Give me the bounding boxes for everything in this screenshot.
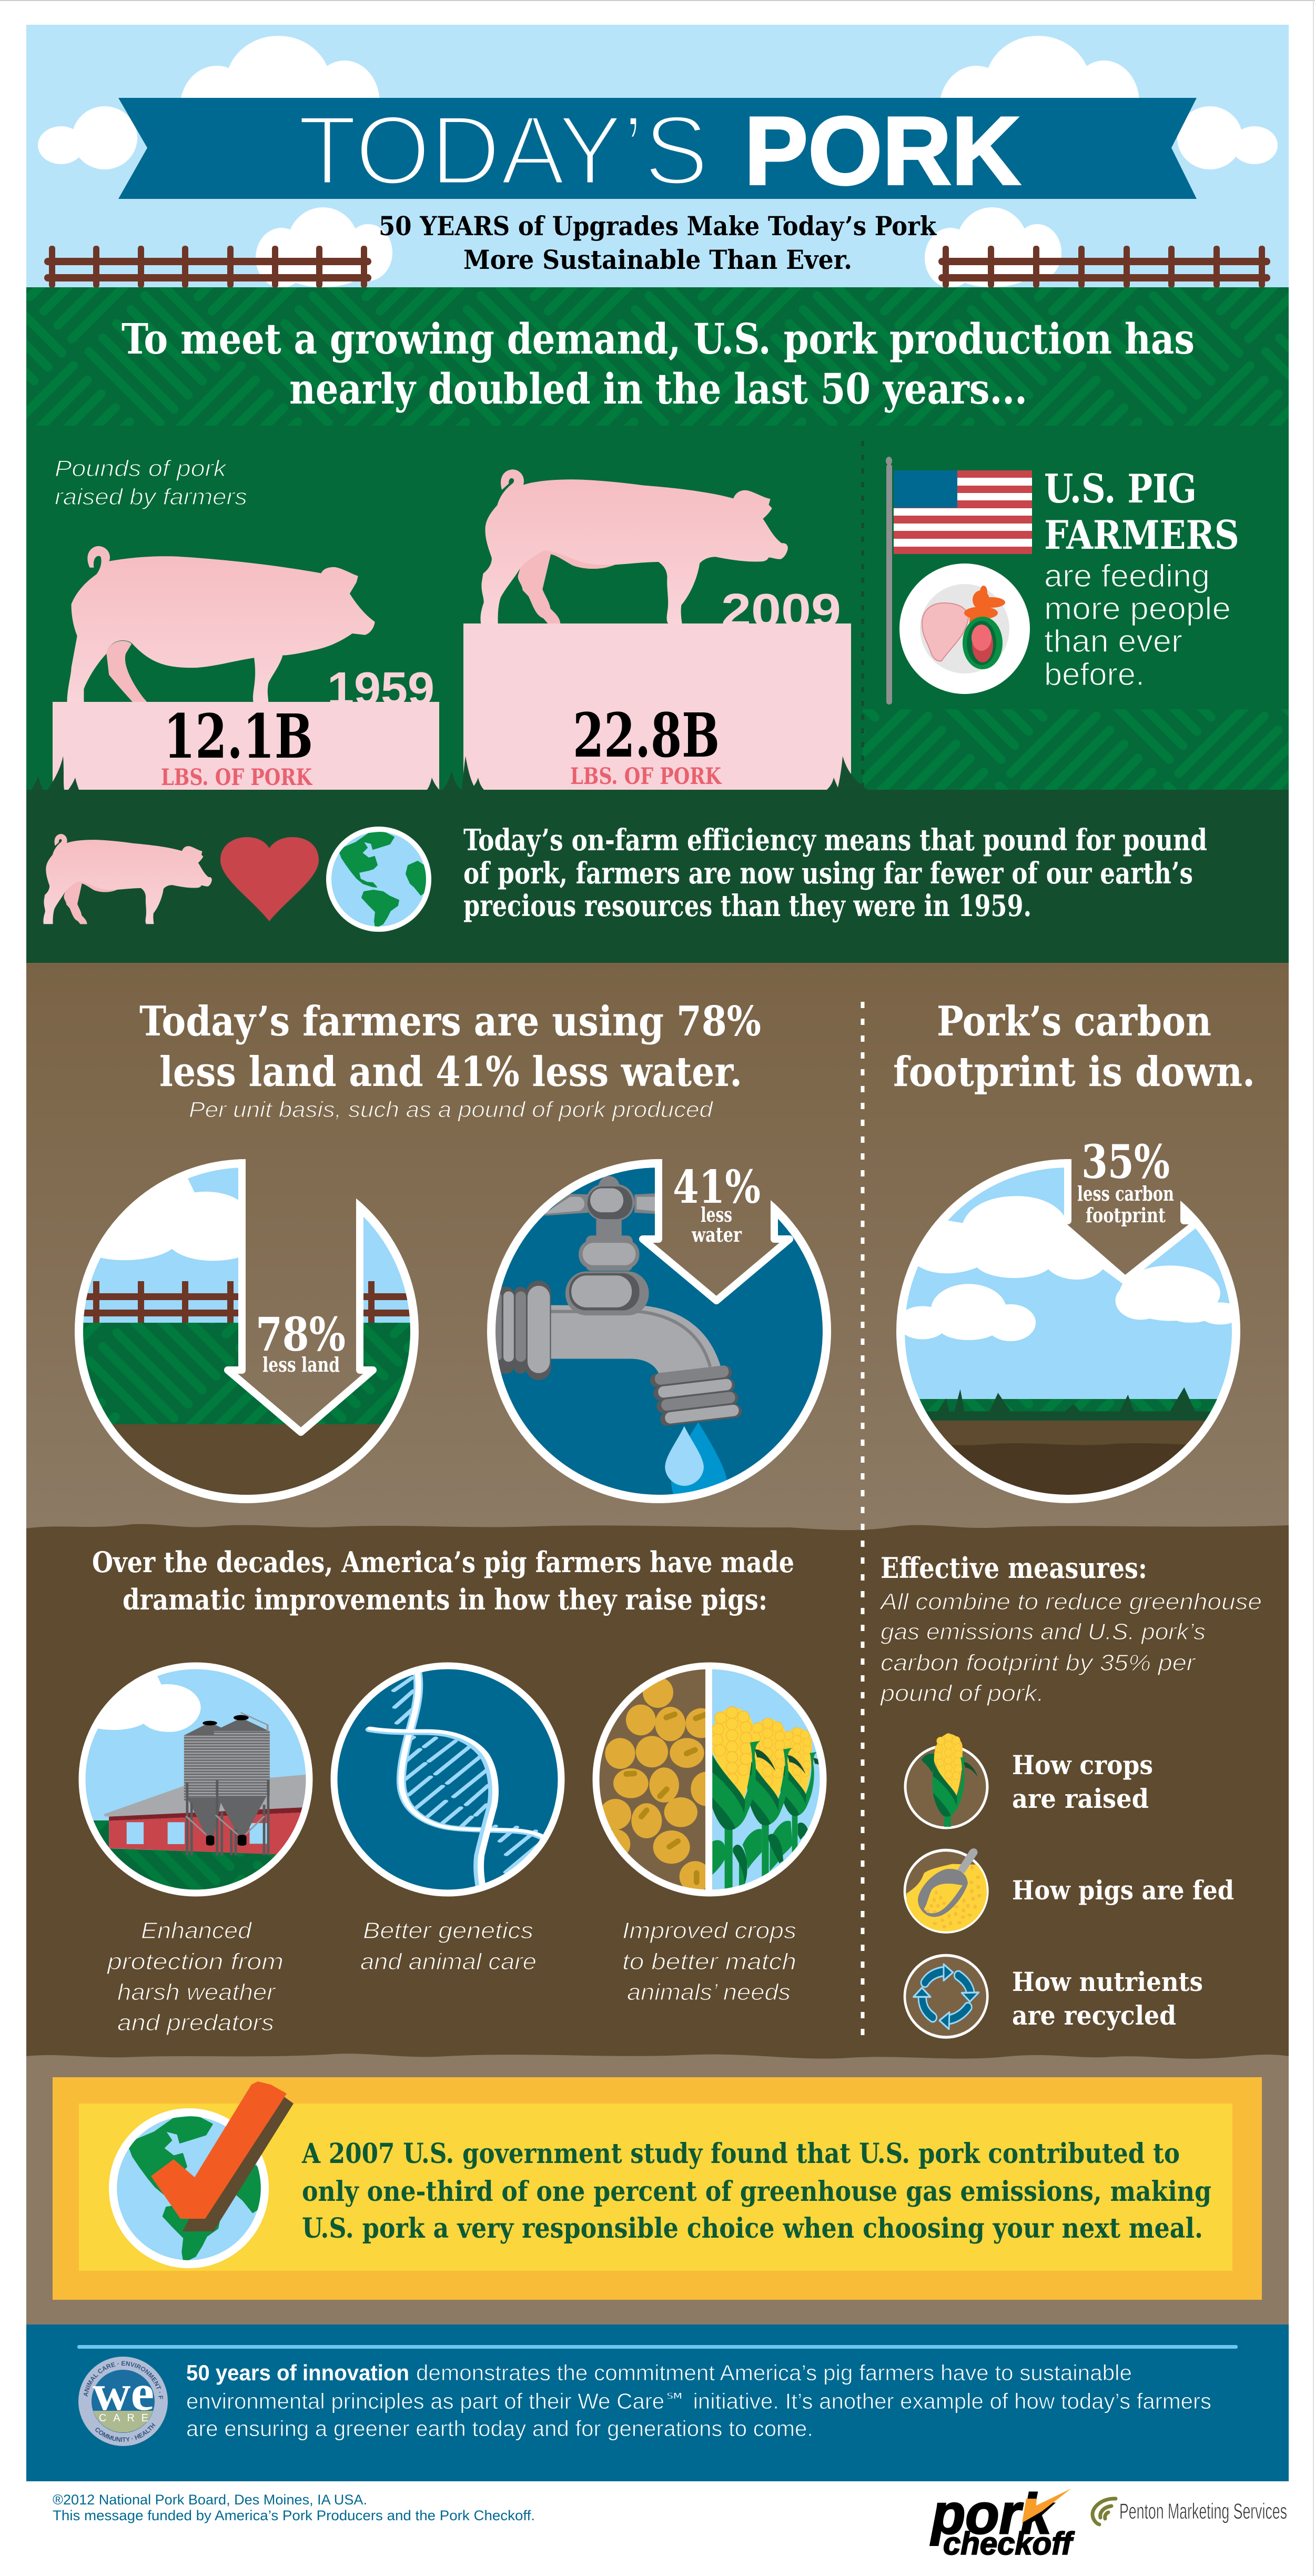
footer: credits: ®2012 National Pork Board, Des Moines, IA USA.: [53, 2492, 367, 2508]
footer: credits: [53, 2492, 535, 2523]
icon: plate of food: [899, 564, 1030, 694]
circle: barn and silos: [79, 1663, 312, 1896]
text: efficiency: precious resources than they were in 1959.: [463, 889, 1031, 923]
title: [298, 95, 1020, 205]
text: only one-third of one percent of greenhouse gas emissions, making: [302, 2176, 1211, 2208]
icon: soybeans: [603, 1678, 705, 1890]
text: innovation: 50 years of innovation: [186, 2360, 409, 2385]
callout: 35%: [1077, 1134, 1174, 1227]
text: how crops: [1012, 1749, 1153, 1814]
icon: we care seal: COMMUNITY · HEALTH: [95, 2423, 156, 2442]
icon: check mark: [151, 2081, 294, 2231]
label: pounds of pork: Pounds of pork: [55, 456, 227, 481]
title: TODAY’S: [298, 95, 709, 205]
icon: pig: [43, 834, 212, 924]
caption: crops: to better match: [622, 1949, 796, 1975]
caption: genetics: [360, 1918, 537, 1975]
text: how nutrients: are recycled: [1012, 2000, 1176, 2031]
logo: pork checkoff: [930, 2482, 1075, 2561]
circle: carbon 35%: [889, 1134, 1250, 1510]
pedestal 2009: [463, 623, 851, 790]
numbers 1959: [161, 701, 313, 791]
caption: protection: and predators: [117, 2010, 274, 2036]
title: PORK: [744, 96, 1020, 205]
panel: efficiency band: [26, 790, 1289, 963]
icon: we care seal: [78, 2357, 168, 2446]
icon: faucet: [495, 1176, 742, 1497]
label: pounds of pork: [55, 456, 247, 510]
text: efficiency: [463, 823, 1207, 923]
caption: crops: [622, 1918, 796, 2005]
year 1959: 1959: [327, 663, 434, 716]
flagpole: [886, 457, 892, 705]
icon: recycling arrows: [905, 1955, 987, 2037]
callout: 41%: [673, 1161, 761, 1246]
icon: feed scoop: [905, 1848, 989, 1933]
icon: crops: [905, 1734, 987, 1828]
icon: globe: [109, 2108, 269, 2268]
text: U.S. pig farmers: [1044, 466, 1239, 692]
text: innovation: environmental principles as part of their We Care℠ initiative. It’s another example of how today’s farmers: [186, 2389, 1211, 2413]
caption: protection: Enhanced: [141, 1918, 252, 1944]
icon: we care seal: ANIMAL CARE · ENVIRONMENT · FOOD SAFETY: [83, 2361, 163, 2399]
text: U.S. pork a very responsible choice when choosing your next meal.: [302, 2212, 1203, 2245]
text: U.S. pig farmers: more people: [1044, 591, 1231, 626]
text: U.S. pig farmers: before.: [1044, 657, 1145, 692]
clouds: [897, 1196, 1241, 1341]
callout: 41%: 41%: [673, 1161, 761, 1214]
text: U.S. pig farmers: U.S. PIG: [1044, 466, 1197, 512]
caption: protection: protection from: [106, 1949, 284, 1975]
text: U.S. pig farmers: FARMERS: [1044, 512, 1239, 558]
text: effective measures: gas emissions and U.S. pork’s: [881, 1619, 1206, 1645]
numbers 1959: LBS. OF PORK: [161, 764, 312, 791]
clouds: [38, 36, 1278, 288]
icon: globe: [326, 827, 431, 932]
flag: [894, 470, 1032, 554]
heading: improvements: Over the decades, America’s pig farmers have made: [92, 1545, 794, 1579]
text: effective measures: All combine to reduce greenhouse: [879, 1589, 1262, 1615]
subtitle: [379, 210, 937, 275]
pedestal 1959: [53, 702, 439, 790]
caption: crops: animals’ needs: [627, 1979, 791, 2005]
numbers 2009: LBS. OF PORK: [570, 763, 722, 790]
icon: corn: [712, 1706, 819, 1889]
heading: improvements: dramatic improvements in how they raise pigs:: [123, 1583, 767, 1616]
text: effective measures: [879, 1551, 1262, 1706]
text: effective measures: Effective measures:: [881, 1551, 1147, 1585]
callout: 78%: 78%: [256, 1307, 346, 1362]
text: U.S. pig farmers: than ever: [1044, 623, 1182, 659]
numbers 2009: [570, 700, 722, 790]
subtitle: More Sustainable Than Ever.: [463, 244, 852, 275]
icon: we care seal: we: [93, 2364, 154, 2421]
pig 1959: [67, 546, 375, 702]
logo: pork checkoff: checkoff: [943, 2526, 1075, 2561]
label: pounds of pork: raised by farmers: [55, 484, 247, 510]
panel: green field: [26, 287, 1289, 791]
numbers 1959: 12.1B: [164, 701, 313, 772]
caption: protection: harsh weather: [117, 1979, 277, 2005]
heading: improvements: [92, 1545, 794, 1616]
heading: carbon footprint: footprint is down.: [893, 1048, 1255, 1096]
caption: protection: [106, 1918, 284, 2036]
circle: soybeans and corn: [596, 1663, 828, 1895]
callout: 41%: less: [701, 1203, 732, 1226]
icon: we care seal: CARE: [99, 2412, 148, 2424]
grass tufts: [32, 756, 868, 790]
logo: pork checkoff: pork: [930, 2482, 1054, 2545]
text: U.S. pig farmers: are feeding: [1044, 558, 1210, 593]
text: efficiency: Today’s on-farm efficiency means that pound for pound: [463, 823, 1207, 858]
circle: water 41%: [489, 1147, 831, 1505]
footer: credits: This message funded by America’s Pork Producers and the Pork Checkoff.: [53, 2508, 535, 2523]
pig 2009: [481, 469, 788, 623]
heading: land and water: Per unit basis, such as a pound of pork produced: [189, 1097, 714, 1122]
icon: silos: [184, 1713, 270, 1856]
text: innovation: are ensuring a greener earth today and for generations to come.: [186, 2416, 813, 2441]
text: [301, 2138, 1211, 2245]
headline: To meet a growing demand, U.S. pork production has: [122, 314, 1195, 364]
callout: 35%: less carbon: [1077, 1182, 1174, 1205]
icon: heart: [220, 837, 319, 921]
caption: genetics: Better genetics: [363, 1918, 533, 1944]
callout: government study: [53, 2077, 1262, 2300]
text: how nutrients: How nutrients: [1012, 1966, 1203, 1997]
divider: [861, 441, 864, 790]
fence right: [938, 246, 1270, 288]
heading: land and water: [139, 998, 761, 1122]
panel: sky header: [26, 25, 1289, 288]
text: how crops: are raised: [1012, 1783, 1149, 1814]
callout: 78%: less land: [262, 1353, 340, 1376]
heading: land and water: less land and 41% less water.: [159, 1048, 742, 1096]
numbers 2009: 22.8B: [573, 700, 720, 771]
caption: crops: Improved crops: [622, 1918, 796, 1944]
circle: DNA: [331, 1663, 568, 1899]
callout: 41%: water: [691, 1223, 742, 1246]
text: how nutrients: [1012, 1966, 1203, 2031]
text: innovation: demonstrates the commitment America’s pig farmers have to sustainable: [416, 2360, 1132, 2385]
year 2009: 2009: [721, 585, 841, 637]
text: innovation: [186, 2360, 1211, 2441]
caption: genetics: and animal care: [360, 1949, 537, 1975]
text: effective measures: carbon footprint by 35% per: [881, 1650, 1197, 1676]
banner: [118, 98, 1197, 199]
text: efficiency: of pork, farmers are now using far fewer of our earth’s: [463, 856, 1193, 891]
callout: 35%: footprint: [1086, 1203, 1166, 1227]
panel: brown soil background: [26, 963, 1289, 2325]
callout: 35%: 35%: [1081, 1134, 1170, 1189]
subtitle: 50 YEARS of Upgrades Make Today’s Pork: [379, 210, 937, 242]
text: effective measures: pound of pork.: [879, 1681, 1044, 1706]
headline: [122, 314, 1195, 414]
headline: nearly doubled in the last 50 years...: [289, 364, 1027, 414]
heading: carbon footprint: Pork’s carbon: [937, 998, 1211, 1045]
fence left: [44, 246, 371, 288]
text: A 2007 U.S. government study found that U.S. pork contributed to: [301, 2138, 1180, 2170]
heading: land and water: Today’s farmers are using 78%: [139, 998, 761, 1045]
heading: carbon footprint: [893, 998, 1255, 1096]
text: how crops: How crops: [1012, 1749, 1153, 1780]
circle: land 78%: [75, 1159, 419, 1503]
text: how pigs are fed: How pigs are fed: [1012, 1875, 1234, 1906]
